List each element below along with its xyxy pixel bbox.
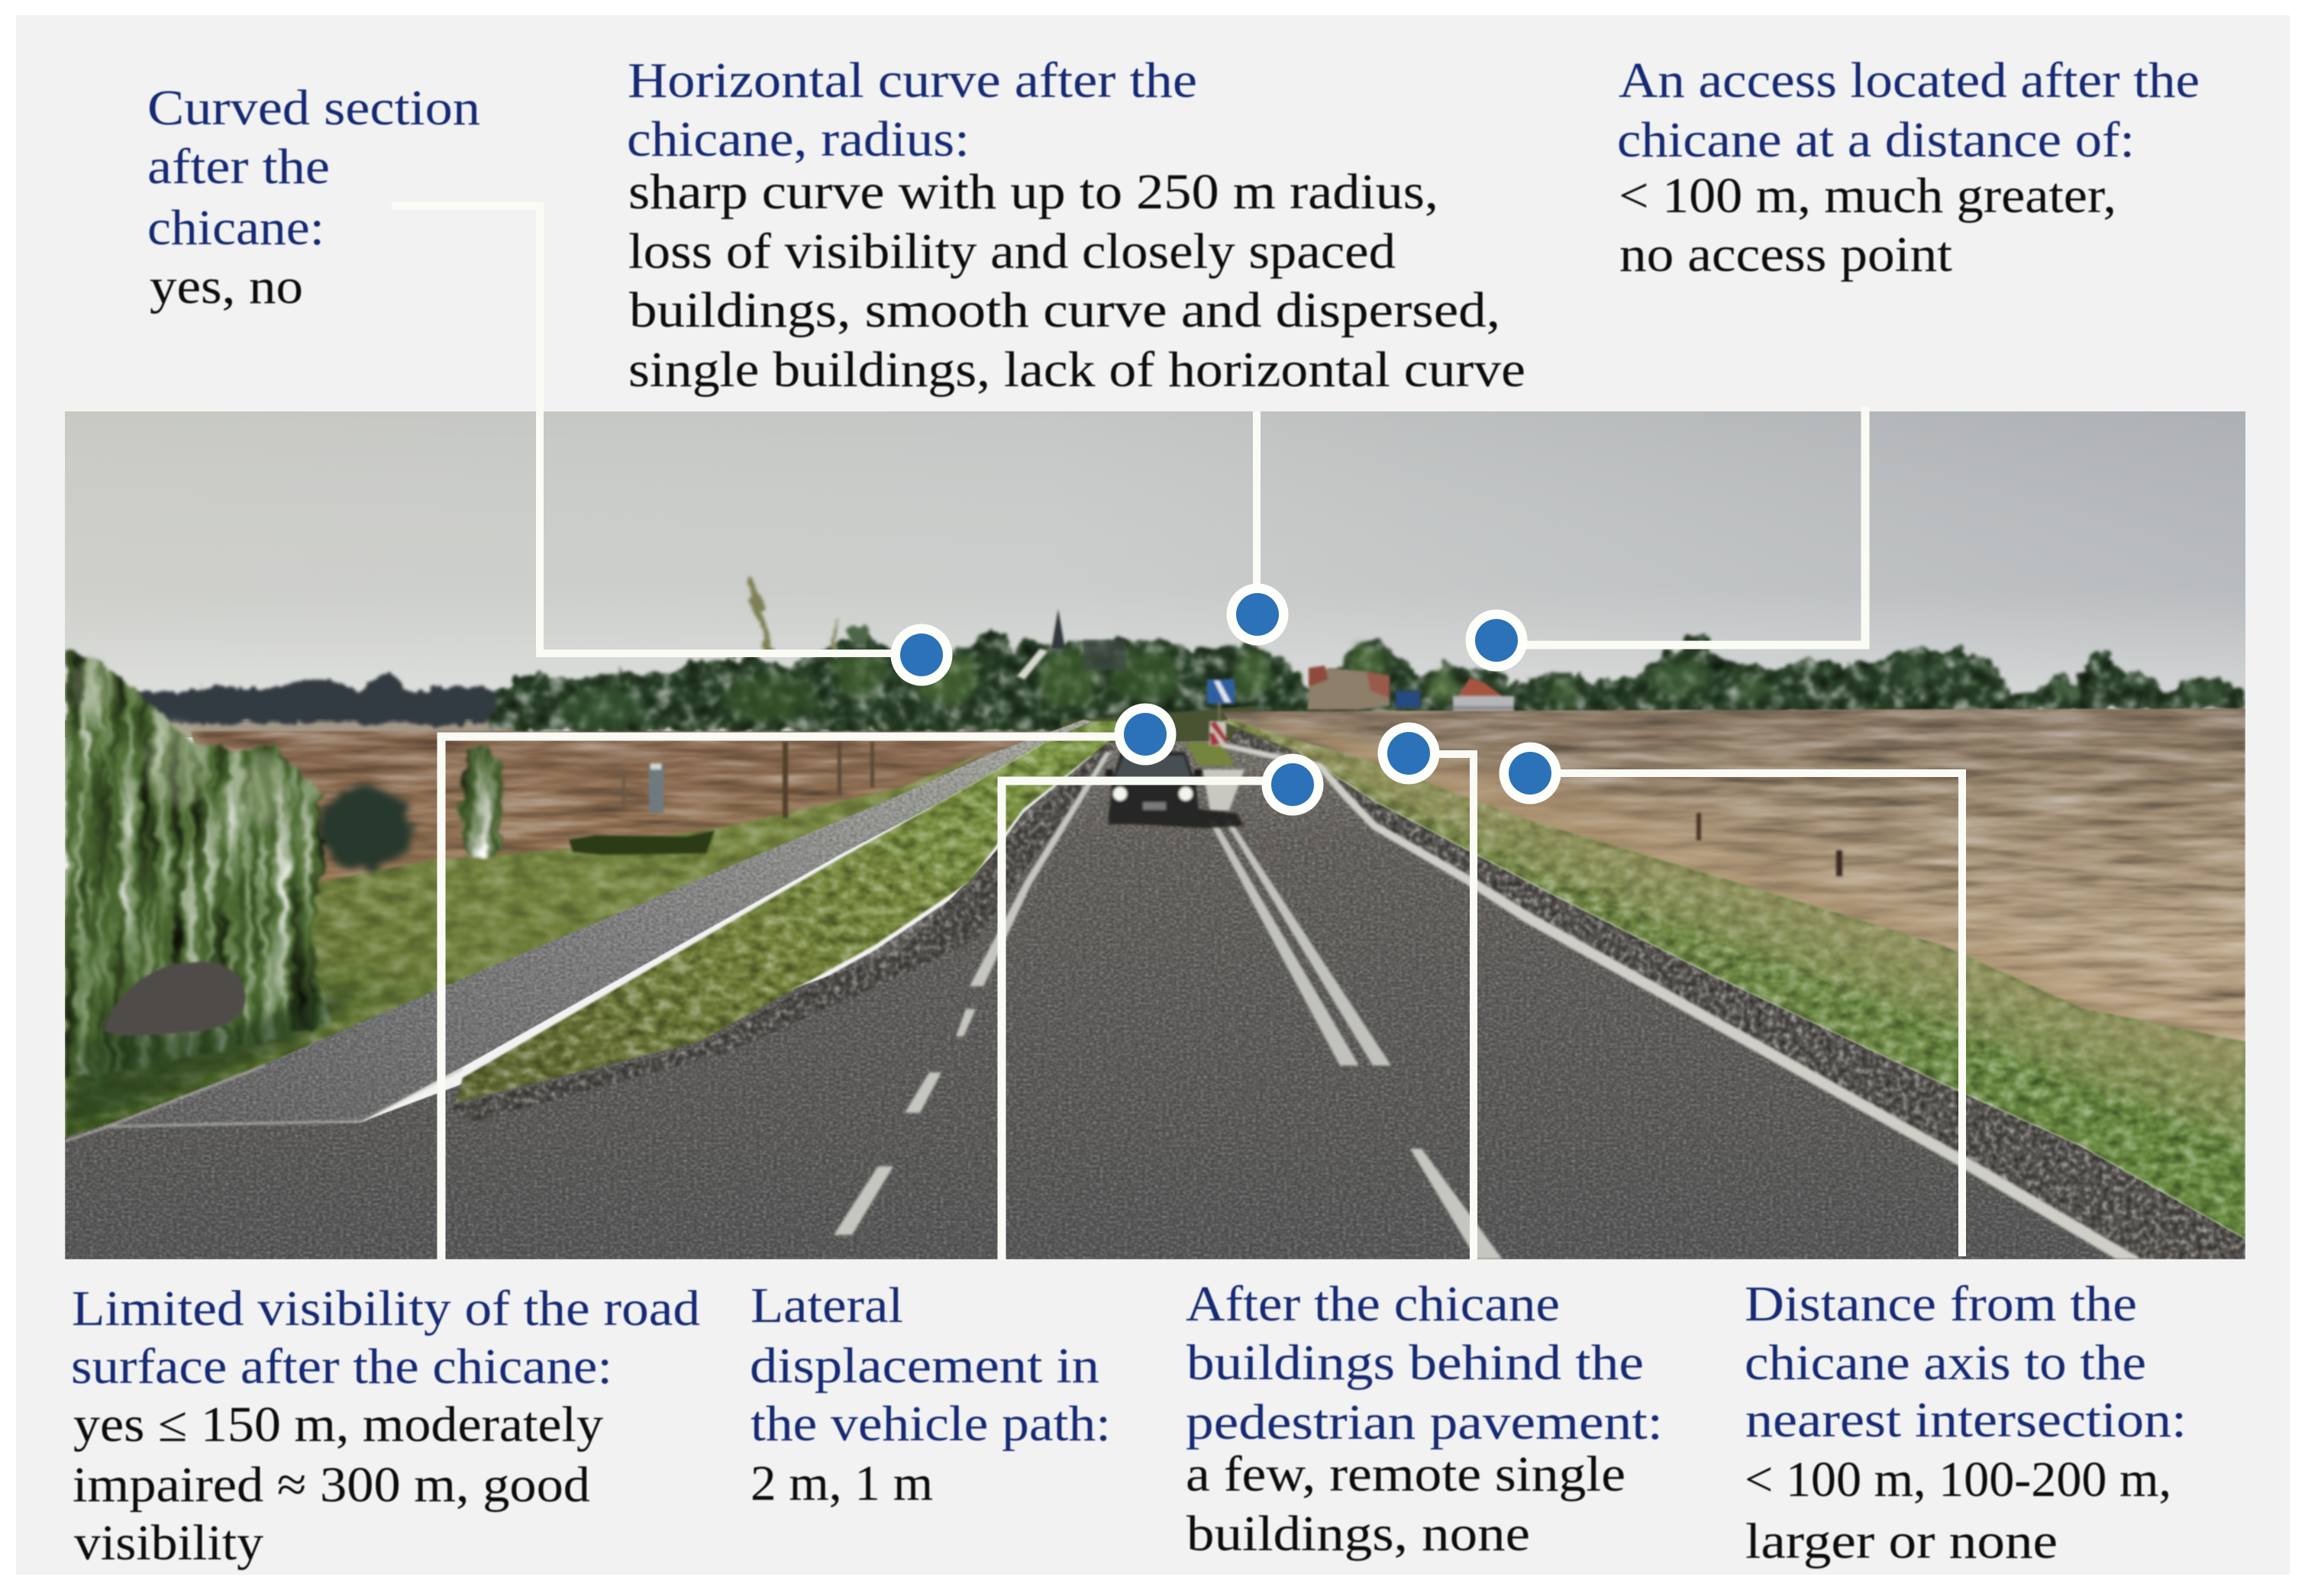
text block: horizontal curve after the chicane: buildings, smooth curve and dispersed, (629, 282, 1500, 338)
text block: distance to the nearest intersection: Distance from the (1745, 1276, 2137, 1332)
dry patches within the verge (1229, 719, 2245, 1145)
central island (1186, 743, 1235, 766)
right gravel shoulder (1229, 729, 2245, 1259)
text block: horizontal curve after the chicane (627, 53, 1525, 398)
text block: horizontal curve after the chicane: chicane, radius: (627, 111, 970, 167)
marker: lateral displacement (1261, 754, 1324, 815)
grass strip between path and road (456, 721, 1122, 1103)
text block: buildings behind the pedestrian pavement: buildings behind the (1186, 1335, 1644, 1391)
willow tree (65, 649, 328, 1080)
boulder (104, 962, 246, 1036)
church steeple (1051, 609, 1065, 649)
marker: access (1466, 609, 1527, 672)
blue direction sign (1207, 679, 1235, 725)
dark gravel edge left (447, 743, 1115, 1122)
marker: limited visibility (1115, 704, 1176, 765)
house with red roof (1307, 666, 1420, 710)
text block: access located after the chicane: no access point (1619, 227, 1952, 282)
marker: buildings (1377, 722, 1440, 785)
text block: access located after the chicane (1617, 53, 2200, 282)
leader line: curved section (392, 206, 922, 653)
text block: access located after the chicane: < 100 m, much greater, (1619, 168, 2116, 224)
text block: horizontal curve after the chicane: sharp curve with up to 250 m radius, (628, 164, 1438, 220)
hazard chevron board (1209, 721, 1226, 746)
text block: lateral displacement in the vehicle path: Lateral (751, 1278, 903, 1333)
text block: horizontal curve after the chicane: single buildings, lack of horizontal curve (628, 342, 1525, 398)
text block: lateral displacement in the vehicle path: displacement in (750, 1338, 1099, 1394)
right field (1222, 708, 2245, 1069)
distant tree band left (130, 673, 519, 724)
text block: limited visibility of the road surface: impaired ≈ 300 m, good (73, 1457, 590, 1513)
text block: curved section after the chicane (147, 80, 480, 314)
narrow shrub (458, 744, 502, 859)
text block: access located after the chicane: An access located after the (1619, 53, 2200, 108)
right grass verge (1222, 719, 2245, 1239)
text block: curved section after the chicane: chicane: (147, 200, 324, 256)
fence posts and grey marker (622, 742, 874, 818)
leader line: lateral displacement (1002, 781, 1293, 1259)
white sign post diagonal (1017, 649, 1048, 679)
left road edge line (970, 752, 1112, 986)
text block: distance to the nearest intersection (1745, 1276, 2187, 1569)
leader line: horizontal curve (1253, 411, 1261, 614)
cycle path (65, 720, 1093, 1141)
photo: rural road approaching a chicane (65, 411, 2245, 1259)
asphalt junction and road base (65, 740, 2138, 1259)
chevron road marking (1203, 769, 1245, 811)
young tree against the sky (747, 576, 870, 656)
text block: horizontal curve after the chicane: loss of visibility and closely spaced (628, 224, 1396, 279)
double centre line (1209, 821, 1391, 1066)
text block: limited visibility of the road surface: visibility (74, 1515, 263, 1571)
text block: access located after the chicane: chicane at a distance of: (1617, 112, 2135, 168)
text block: distance to the nearest intersection: chicane axis to the (1745, 1335, 2146, 1391)
text block: limited visibility of the road surface: yes ≤ 150 m, moderately (73, 1397, 603, 1453)
marker: curved section (890, 624, 953, 685)
text block: limited visibility of the road surface (71, 1281, 700, 1571)
marker: nearest intersection (1500, 742, 1561, 804)
left field (191, 720, 1083, 893)
sky (65, 411, 2245, 732)
text block: curved section after the chicane: after the (147, 139, 330, 195)
central and right tree line (489, 628, 2245, 734)
text block: buildings behind the pedestrian pavement: buildings, none (1186, 1506, 1530, 1562)
text block: lateral displacement in the vehicle path: 2 m, 1 m (751, 1456, 933, 1511)
text block: horizontal curve after the chicane: Horizontal curve after the (628, 53, 1197, 108)
text block: curved section after the chicane: yes, no (150, 259, 303, 314)
marker: horizontal curve (1226, 583, 1289, 646)
willow pale leaves (70, 661, 286, 828)
leader line: access (1496, 407, 1865, 645)
text block: buildings behind the pedestrian pavement: pedestrian pavement: (1186, 1394, 1663, 1450)
leader line: nearest intersection (1530, 773, 1962, 1256)
text block: buildings behind the pedestrian pavement: After the chicane (1186, 1276, 1560, 1332)
text block: lateral displacement in the vehicle path (750, 1278, 1111, 1511)
hedge strip behind lawn (569, 830, 715, 855)
text block: distance to the nearest intersection: larger or none (1745, 1514, 2058, 1569)
shadow below willow (65, 985, 366, 1122)
text block: lateral displacement in the vehicle path: the vehicle path: (751, 1396, 1111, 1452)
car (1106, 752, 1244, 828)
leader line: limited visibility (441, 737, 1145, 1259)
cycle path edge markings (65, 1066, 463, 1141)
leader line: buildings (1409, 754, 1474, 1259)
text block: curved section after the chicane: Curved section (147, 80, 480, 136)
text block: buildings behind the pedestrian pavement: a few, remote single (1186, 1446, 1625, 1502)
text block: limited visibility of the road surface: Limited visibility of the road (72, 1281, 700, 1336)
foliage highlights (561, 644, 2226, 731)
horizon haze strip (65, 721, 523, 737)
lane dashes (834, 1009, 1503, 1259)
dry grass along the verge (1252, 714, 2245, 1065)
right road edge line (1222, 743, 2142, 1259)
text block: distance to the nearest intersection: < 100 m, 100-200 m, (1745, 1452, 2171, 1507)
lawn (65, 752, 986, 1141)
small roadside posts (1696, 813, 1842, 876)
text block: buildings behind the pedestrian pavement (1186, 1276, 1663, 1562)
dark shrub (318, 787, 412, 869)
text block: limited visibility of the road surface: surface after the chicane: (71, 1339, 612, 1394)
grey tower block (1083, 640, 1126, 670)
hedge and verge at the road vanishing point (1061, 706, 1298, 756)
text block: distance to the nearest intersection: nearest intersection: (1745, 1392, 2187, 1448)
white house (1453, 678, 1514, 716)
